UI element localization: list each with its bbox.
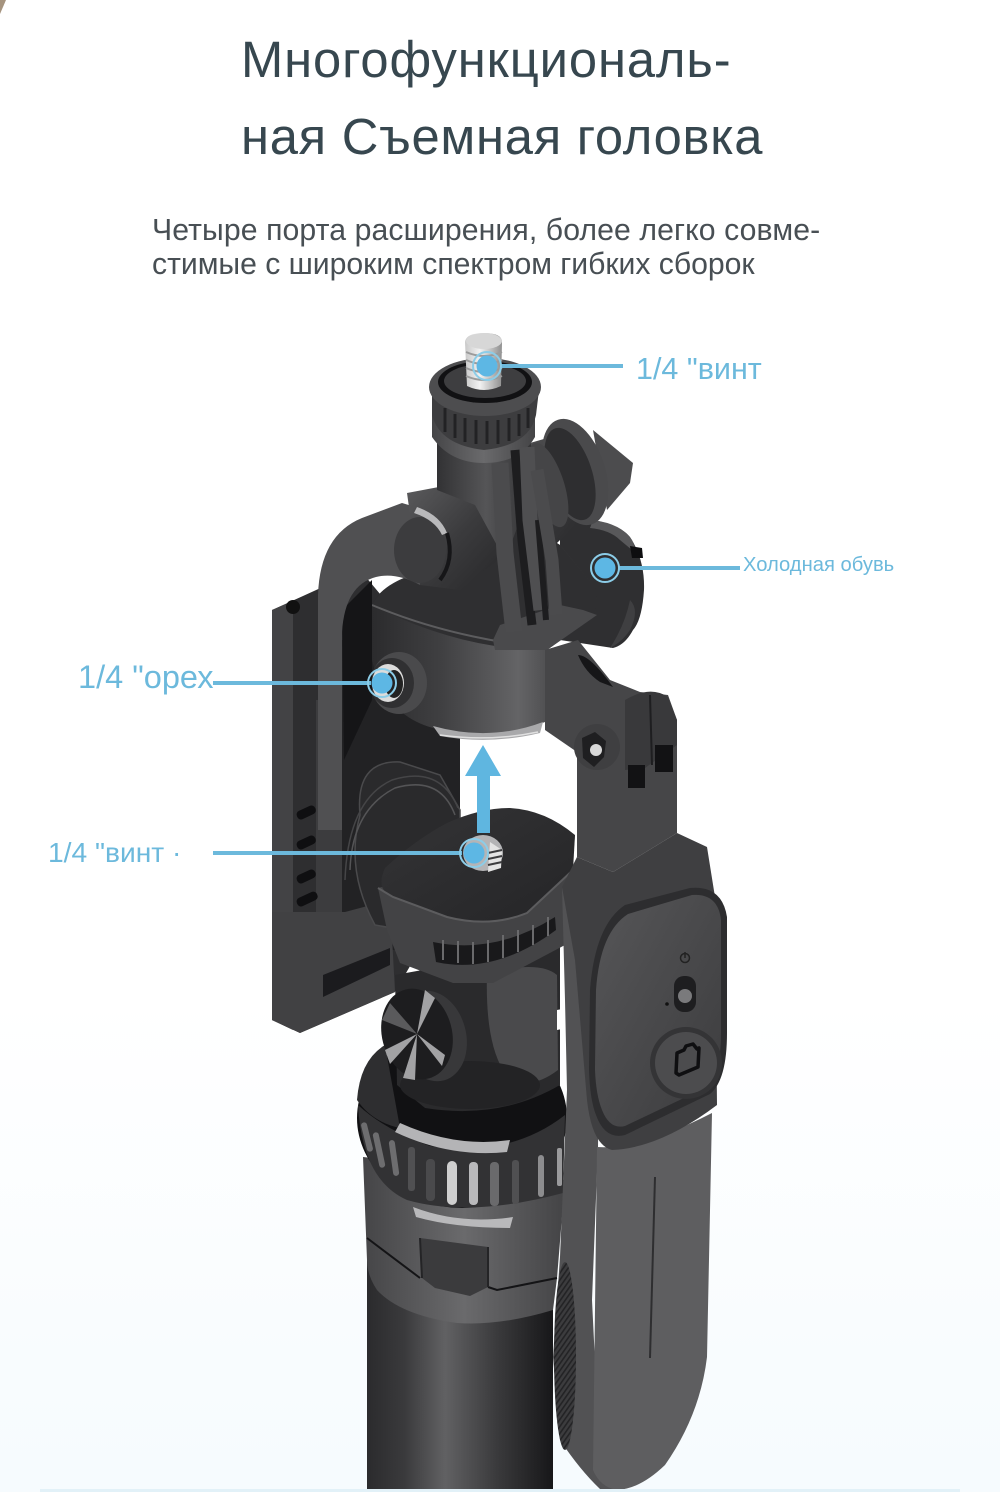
remote housing xyxy=(562,833,727,1150)
label: nut: 1/4 "орех xyxy=(78,659,214,695)
base collar xyxy=(363,1157,565,1323)
bottom strip xyxy=(40,1489,960,1492)
callout pointer: top screw xyxy=(473,352,623,380)
up arrow xyxy=(465,745,501,833)
product: selfie stick tripod head xyxy=(272,333,727,1490)
sliding rail prongs xyxy=(493,447,597,650)
top neck and mounting knob xyxy=(429,358,541,560)
remote controls xyxy=(650,952,722,1099)
ball head body xyxy=(395,945,567,1111)
knurled dial ring xyxy=(357,1028,567,1208)
right folding arm xyxy=(545,640,677,872)
description line 1: Четыре порта расширения, более легко совме- xyxy=(152,214,820,247)
cold shoe mount disc xyxy=(560,520,644,648)
1/4 nut hole xyxy=(370,652,427,714)
callout pointer: nut xyxy=(213,669,396,697)
quick release plate xyxy=(378,808,575,983)
collar body xyxy=(372,520,597,740)
description line 2: стимые с широким спектром гибких сборок xyxy=(152,248,755,281)
label: top screw: 1/4 "винт xyxy=(636,352,762,386)
pivot cylinder xyxy=(394,483,507,590)
label: lower screw: 1/4 "винт · xyxy=(48,836,181,868)
top 1/4 screw xyxy=(465,333,502,390)
telescopic pole xyxy=(367,1240,553,1489)
title line 1: Многофункциональ- xyxy=(241,31,732,88)
phone clamp back plate xyxy=(272,570,460,1033)
title line 2: ная Съемная головка xyxy=(241,108,763,165)
corner accent xyxy=(0,0,6,14)
U-shaped arm xyxy=(318,503,432,830)
side lock knob xyxy=(371,981,477,1089)
label: cold shoe: Холодная обувь xyxy=(743,554,894,576)
locking knob with wing xyxy=(500,410,633,560)
lower 1/4 screw xyxy=(463,835,503,872)
callout pointer: cold shoe xyxy=(591,554,740,582)
back clip plate xyxy=(593,1113,712,1490)
side handle strip xyxy=(553,887,625,1489)
knurled grip xyxy=(554,1262,576,1450)
callout pointer: lower screw xyxy=(213,839,488,867)
